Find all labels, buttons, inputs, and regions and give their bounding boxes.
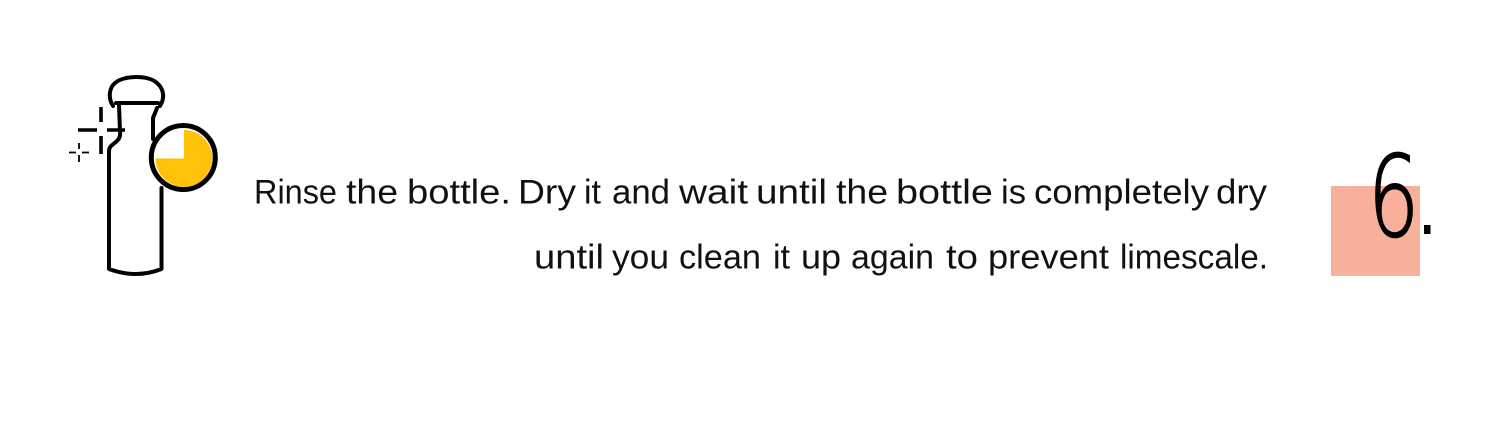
text line 1: the [836,174,888,212]
step number: 6 [1331,133,1430,276]
icon: sparkles [69,107,125,162]
text line 2: up [801,238,841,276]
text line 2 [534,238,1268,276]
text line 1: Dry [518,174,576,212]
text line 1: is [1001,174,1026,212]
text line 2: limescale. [1120,238,1268,276]
period [1424,225,1430,234]
text line 1: until [756,174,827,212]
text line 1: the [346,174,398,212]
text line 1: and [612,174,670,212]
text line 2: clean [679,238,761,276]
numeral: 6 [1368,133,1419,264]
icon: bottle body [109,77,163,274]
salmon square [1331,186,1420,276]
text line 2: you [612,238,669,276]
text line 2: it [773,238,791,276]
text line 1: it [584,174,602,212]
text line 1 [254,174,1267,212]
text line 1: dry [1216,174,1267,212]
icon: bottle with timer [69,77,215,274]
text line 1: Rinse [254,174,337,212]
text line 1: completely [1034,174,1209,212]
text line 2: until [534,238,604,276]
text line 2: to [946,238,978,276]
text line 1: wait [678,174,749,212]
text line 2: again [851,238,934,276]
text line 2: prevent [988,238,1110,276]
text line 1: bottle [896,174,993,212]
text line 1: bottle. [407,174,511,212]
icon: timer [151,126,215,190]
text block: instructions [254,174,1268,276]
